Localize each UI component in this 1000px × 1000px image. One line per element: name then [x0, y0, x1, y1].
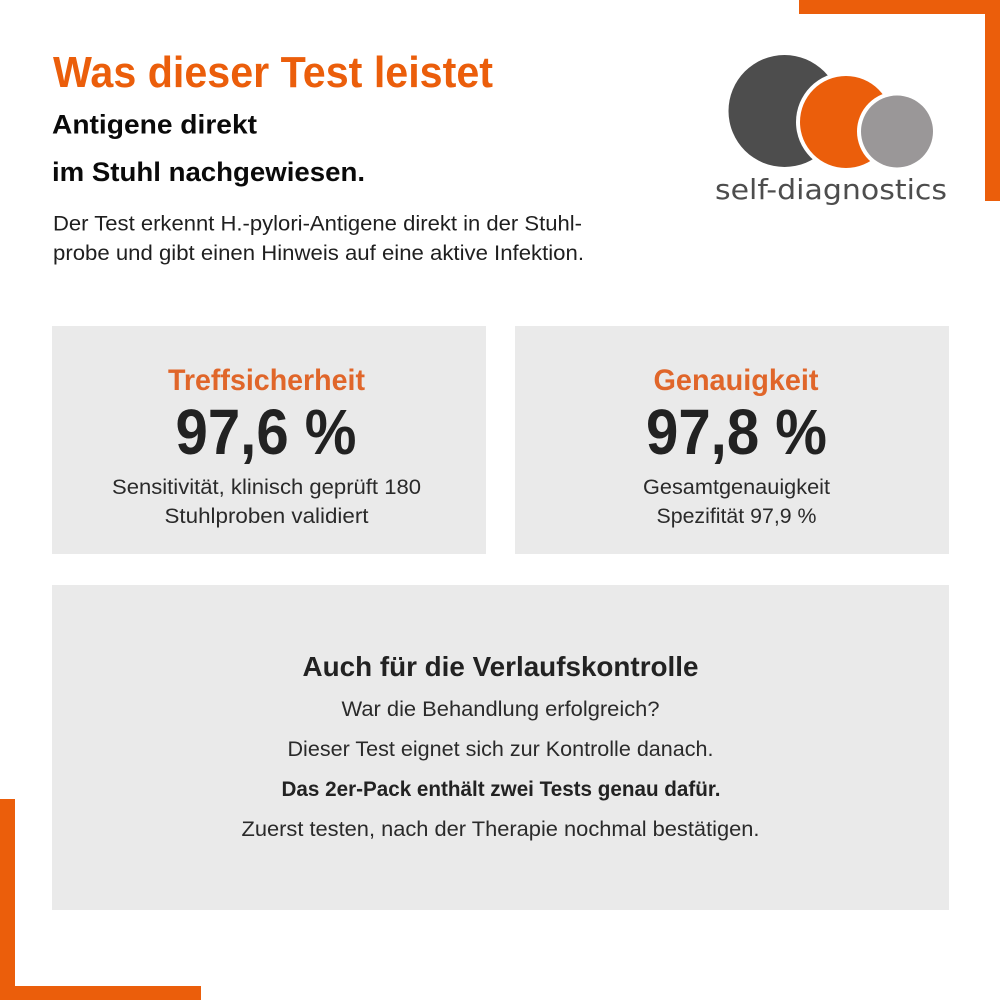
panel description — [112, 476, 421, 528]
subtitle: Antigene direkt — [52, 110, 257, 140]
panel: Genauigkeit — [515, 326, 949, 554]
title: Was dieser Test leistet — [53, 48, 493, 97]
big number: 97,6 % — [176, 396, 356, 468]
panel heading: Auch für die Verlaufskontrolle — [302, 651, 698, 682]
panel description: Gesamtgenauigkeit — [643, 476, 830, 499]
logo wordmark: self-diagnostics — [715, 173, 947, 206]
panel body text: Zuerst testen, nach der Therapie nochmal bestätigen. — [242, 818, 760, 841]
intro text: Der Test erkennt H.-pylori-Antigene direkt in der Stuhl- — [53, 212, 582, 236]
intro text — [53, 212, 584, 265]
panel body text: Das 2er-Pack enthält zwei Tests genau dafür. — [282, 778, 720, 801]
corner bracket: bottom left — [0, 799, 201, 1000]
panel description: Sensitivität, klinisch geprüft 180 — [112, 476, 421, 499]
panel body text: War die Behandlung erfolgreich? — [342, 698, 660, 721]
panel heading: Treffsicherheit — [168, 364, 365, 397]
panel heading: Genauigkeit — [654, 364, 818, 397]
panel: Treffsicherheit — [52, 326, 486, 554]
panel description: Spezifität 97,9 % — [656, 505, 816, 528]
panel description: Stuhlproben validiert — [164, 505, 369, 528]
subtitle: im Stuhl nachgewiesen. — [52, 157, 365, 187]
panel body text: Dieser Test eignet sich zur Kontrolle danach. — [288, 738, 714, 761]
corner bracket: top right — [799, 0, 1000, 201]
big number: 97,8 % — [646, 396, 827, 468]
icon: three overlapping circles — [728, 55, 937, 172]
panel description — [643, 476, 830, 528]
subtitle — [52, 110, 365, 187]
panel body text — [242, 698, 760, 841]
panel: Verlaufskontrolle — [52, 585, 949, 910]
logo: self-diagnostics — [715, 55, 947, 206]
intro text: probe und gibt einen Hinweis auf eine aktive Infektion. — [53, 242, 584, 265]
